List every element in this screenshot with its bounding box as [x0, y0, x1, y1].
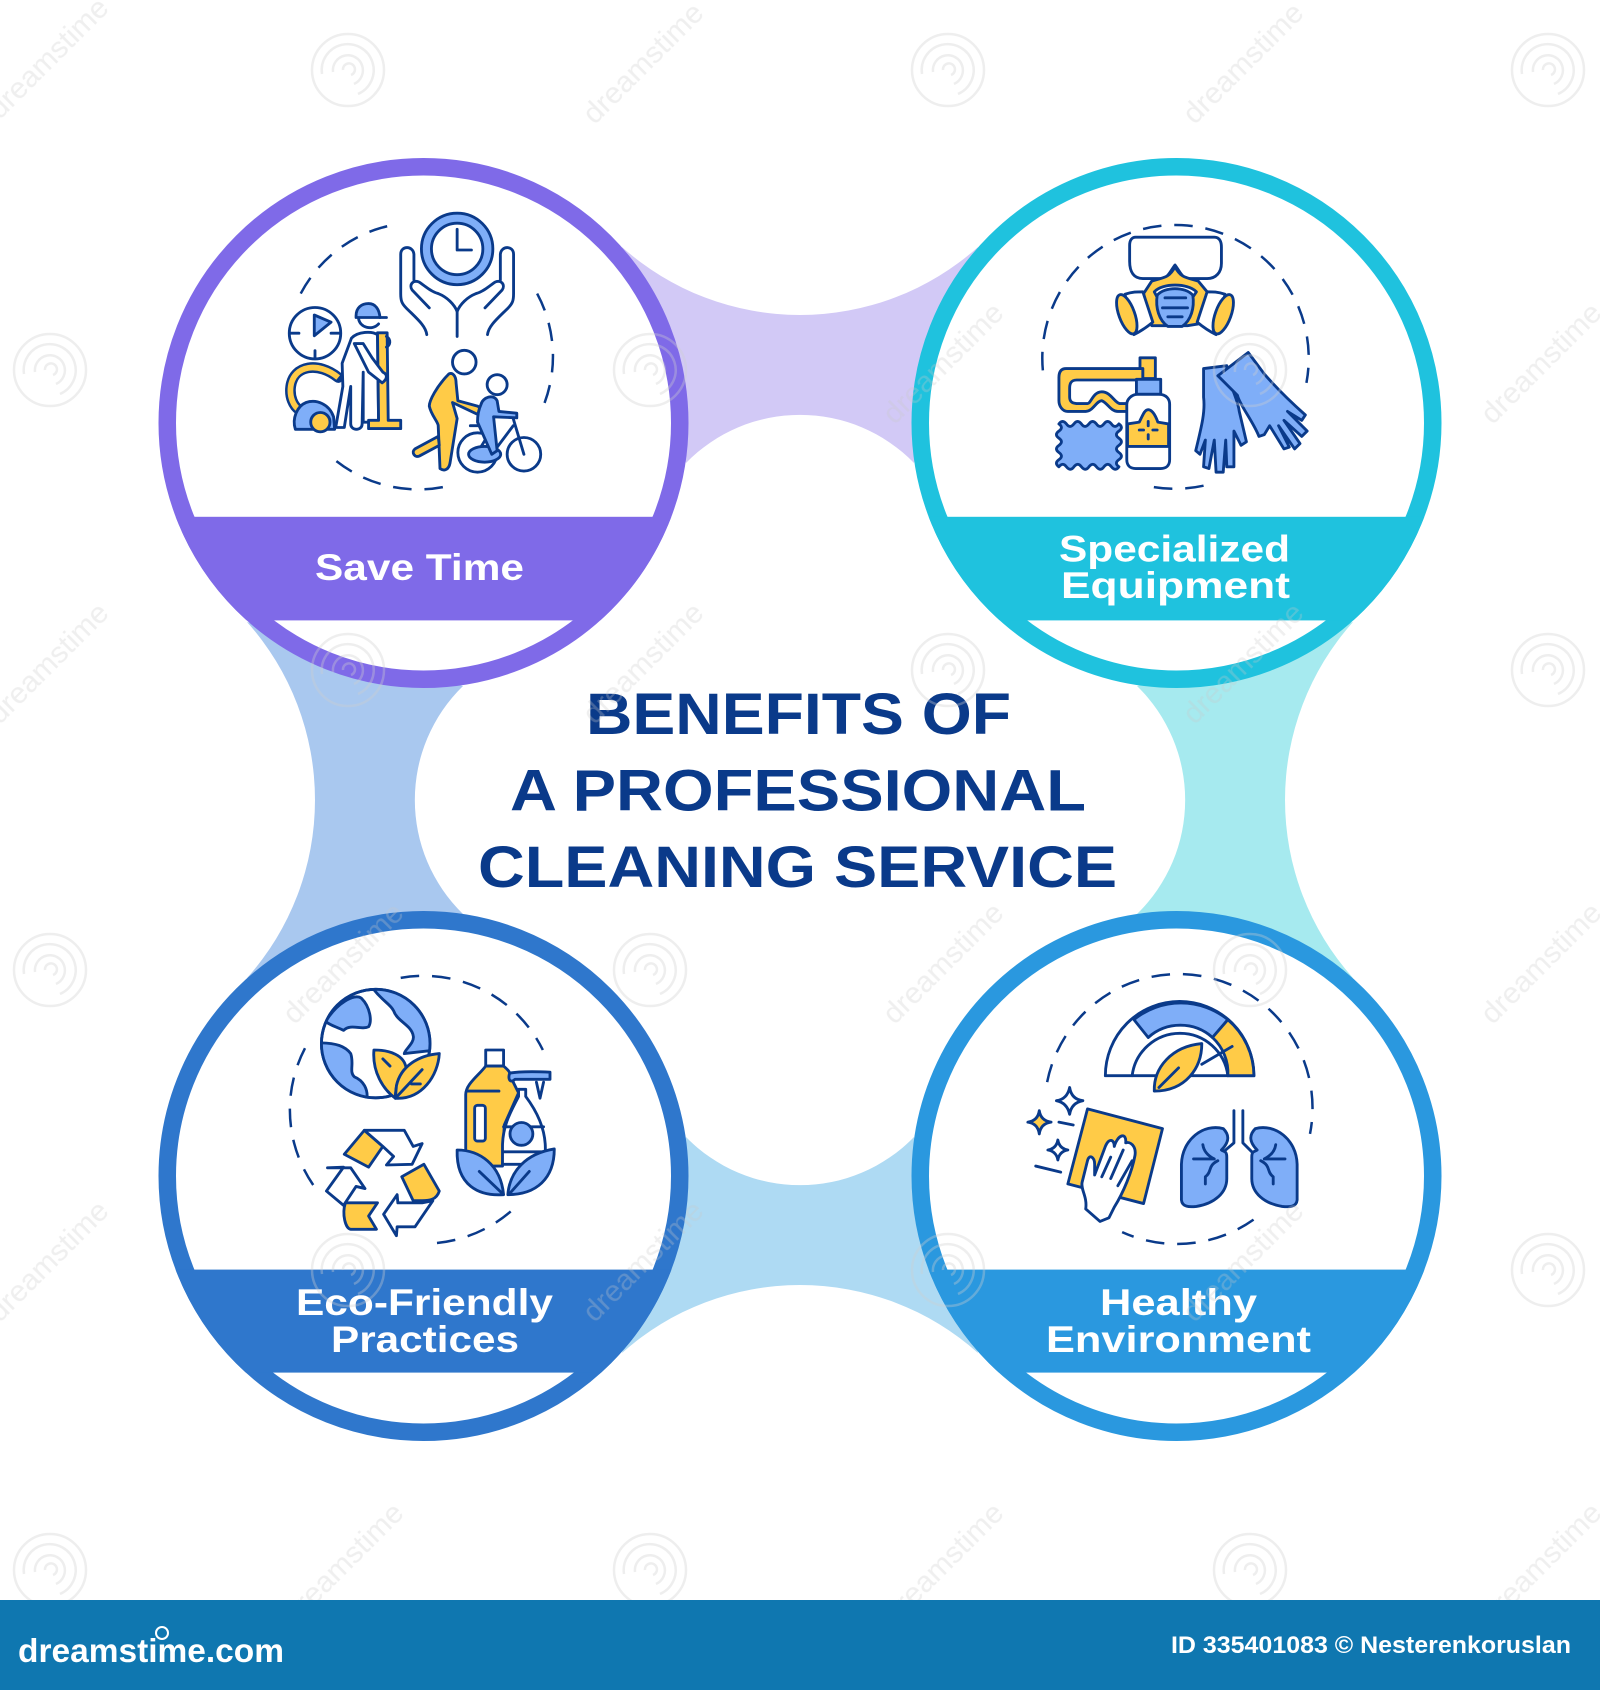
- watermark text: dreamstime: [576, 1194, 710, 1328]
- panel: Eco-Friendly Practices: [150, 920, 700, 1432]
- connector: right teal: [1137, 622, 1353, 978]
- title: [478, 682, 1117, 900]
- watermark text: dreamstime: [576, 0, 710, 130]
- connector: left blue: [247, 622, 463, 978]
- footer credit: ID 335401083 © Nesterenkoruslan: [1171, 1632, 1571, 1659]
- watermark text: dreamstime: [1176, 1194, 1310, 1328]
- watermark text: dreamstime: [1176, 596, 1310, 730]
- label: Eco-Friendly: Eco-Friendly: [296, 1282, 553, 1323]
- label band: Save Time: [150, 517, 700, 620]
- icon: healthy environment: [1028, 974, 1313, 1244]
- label: Specialized: Specialized: [1059, 528, 1290, 569]
- watermark text: dreamstime: [1176, 0, 1310, 130]
- watermark text: dreamstime: [276, 896, 410, 1030]
- watermark text: dreamstime: [876, 296, 1010, 430]
- panel: Save Time: [150, 167, 700, 679]
- icon: save time: [289, 213, 553, 489]
- panel: Specialized Equipment: [900, 167, 1450, 679]
- label band: Healthy Environment: [900, 1270, 1450, 1373]
- connector: bottom sky blue: [622, 1137, 978, 1353]
- label: Save Time: Save Time: [315, 547, 524, 588]
- connector: top purple: [622, 247, 978, 463]
- footer bar: [0, 1600, 1600, 1690]
- icon: eco-friendly practices: [290, 976, 554, 1244]
- title: BENEFITS OF: [586, 682, 1011, 747]
- title: CLEANING SERVICE: [478, 835, 1117, 900]
- label: Practices: Practices: [331, 1319, 519, 1360]
- label band: Specialized Equipment: [900, 517, 1450, 620]
- panel: Healthy Environment: [900, 920, 1450, 1432]
- label: Equipment: Equipment: [1061, 565, 1290, 606]
- footer logo: dreamstime.com: [18, 1632, 284, 1669]
- title: A PROFESSIONAL: [510, 759, 1086, 824]
- label: Environment: Environment: [1046, 1319, 1311, 1360]
- watermark text: dreamstime: [876, 1496, 1010, 1630]
- watermark text: dreamstime: [876, 896, 1010, 1030]
- label: Healthy: Healthy: [1100, 1282, 1257, 1323]
- label band: Eco-Friendly Practices: [150, 1270, 700, 1373]
- watermark text: dreamstime: [576, 596, 710, 730]
- icon: specialized equipment: [1042, 225, 1309, 489]
- watermark text: dreamstime: [276, 1496, 410, 1630]
